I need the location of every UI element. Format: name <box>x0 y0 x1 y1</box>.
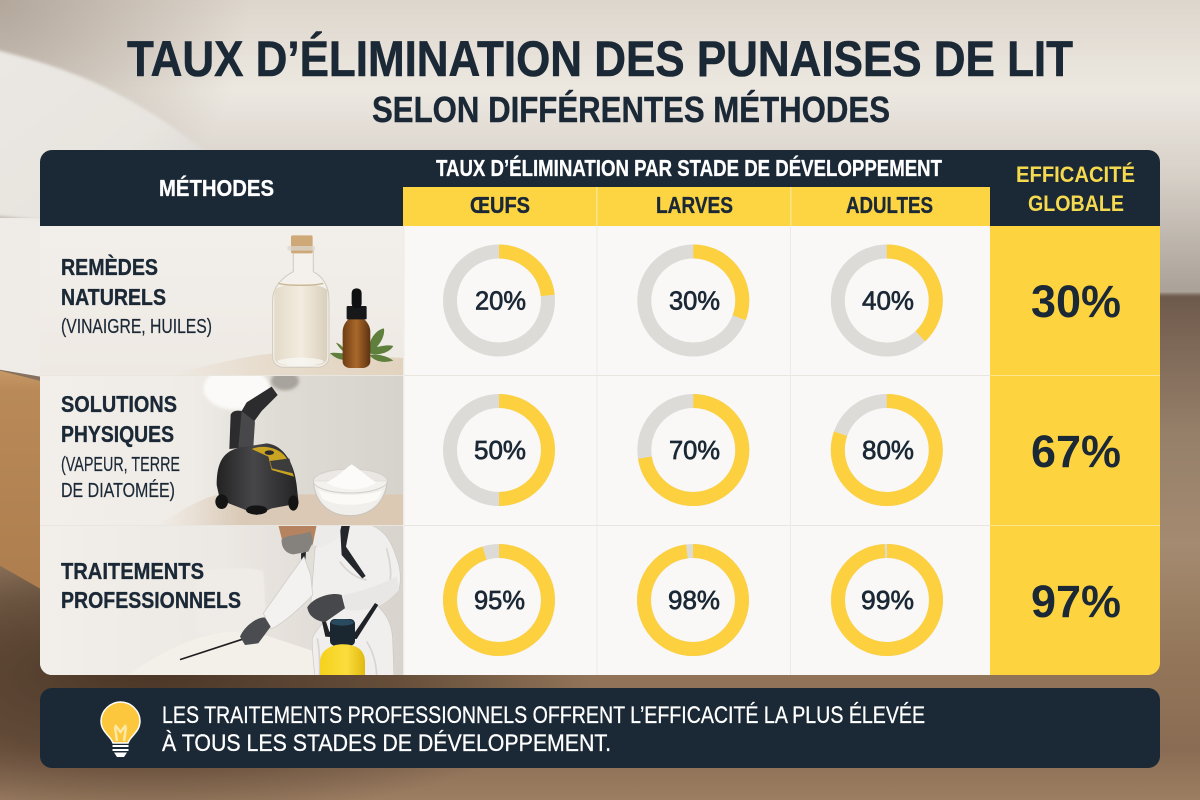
donut: physiques larves 70% <box>644 401 742 499</box>
icon: technician in protective suit with sprayer <box>180 525 400 677</box>
donut: physiques adultes 80% <box>838 401 936 499</box>
row: remèdes naturels <box>40 226 403 375</box>
title <box>127 31 1073 130</box>
callout: key takeaway: À TOUS LES STADES DE DÉVELOPPEMENT. <box>162 730 611 757</box>
donut: remèdes œufs 20% <box>450 252 548 350</box>
row: solutions physiques <box>40 367 403 525</box>
donut: physiques adultes 80%: 80% <box>862 435 914 465</box>
icon: steam cleaner <box>215 387 299 515</box>
overall efficacy column: 97% <box>1031 576 1121 627</box>
donut: physiques œufs 50%: 50% <box>474 435 526 465</box>
donut: physiques larves 70%: 70% <box>669 435 720 465</box>
table header: LARVES <box>656 192 733 218</box>
callout: key takeaway <box>40 688 1160 768</box>
row: remèdes naturels: (VINAIGRE, HUILES) <box>61 316 212 338</box>
table header: ŒUFS <box>470 192 530 218</box>
overall efficacy column: EFFICACITÉ <box>1016 162 1135 187</box>
overall efficacy column: 67% <box>1031 426 1121 477</box>
table header: MÉTHODES <box>159 174 274 201</box>
row: traitements professionnels <box>40 525 403 677</box>
donut: remèdes larves 30%: 30% <box>669 286 720 316</box>
icon: bowl of diatomaceous earth <box>313 464 387 516</box>
row: solutions physiques: DE DIATOMÉE) <box>61 479 175 502</box>
donut: remèdes œufs 20%: 20% <box>475 286 526 316</box>
row: solutions physiques: (VAPEUR, TERRE <box>61 454 180 476</box>
table header <box>40 150 990 226</box>
donut: remèdes adultes 40% <box>838 252 936 350</box>
table header: ADULTES <box>846 192 933 218</box>
donut: professionnels larves 98% <box>644 551 742 649</box>
subtitle: SELON DIFFÉRENTES MÉTHODES <box>372 89 890 130</box>
chart: donut rings <box>450 252 936 649</box>
overall efficacy column: GLOBALE <box>1028 191 1124 216</box>
row: solutions physiques: PHYSIQUES <box>61 421 174 447</box>
icon: light bulb <box>101 702 140 757</box>
donut: professionnels adultes 99% <box>838 551 936 649</box>
icon: amber dropper bottle and leaves <box>330 288 393 368</box>
donut: physiques œufs 50% <box>450 401 548 499</box>
overall efficacy column <box>990 150 1160 675</box>
donut: remèdes adultes 40%: 40% <box>862 286 914 316</box>
callout: key takeaway: LES TRAITEMENTS PROFESSIONNELS OFFRENT L’EFFICACITÉ LA PLUS ÉLEVÉE <box>162 702 925 729</box>
donut: professionnels adultes 99%: 99% <box>861 585 914 615</box>
donut: professionnels larves 98%: 98% <box>668 585 720 615</box>
row: traitements professionnels: TRAITEMENTS <box>61 558 204 584</box>
row: remèdes naturels: REMÈDES <box>61 253 158 280</box>
comparison table <box>40 150 1160 677</box>
row: solutions physiques: SOLUTIONS <box>61 391 177 417</box>
row: remèdes naturels: NATURELS <box>61 284 166 310</box>
table header: TAUX D’ÉLIMINATION PAR STADE DE DÉVELOPPEMENT <box>436 154 942 181</box>
donut: professionnels œufs 95% <box>450 551 548 649</box>
title: TAUX D’ÉLIMINATION DES PUNAISES DE LIT <box>127 31 1073 87</box>
row and column separators <box>40 226 990 675</box>
row: traitements professionnels: PROFESSIONNELS <box>61 587 241 613</box>
icon: glass bottle with cork <box>273 235 329 367</box>
donut: professionnels œufs 95%: 95% <box>474 585 525 615</box>
donut: remèdes larves 30% <box>644 252 742 350</box>
overall efficacy column: 30% <box>1031 276 1121 327</box>
